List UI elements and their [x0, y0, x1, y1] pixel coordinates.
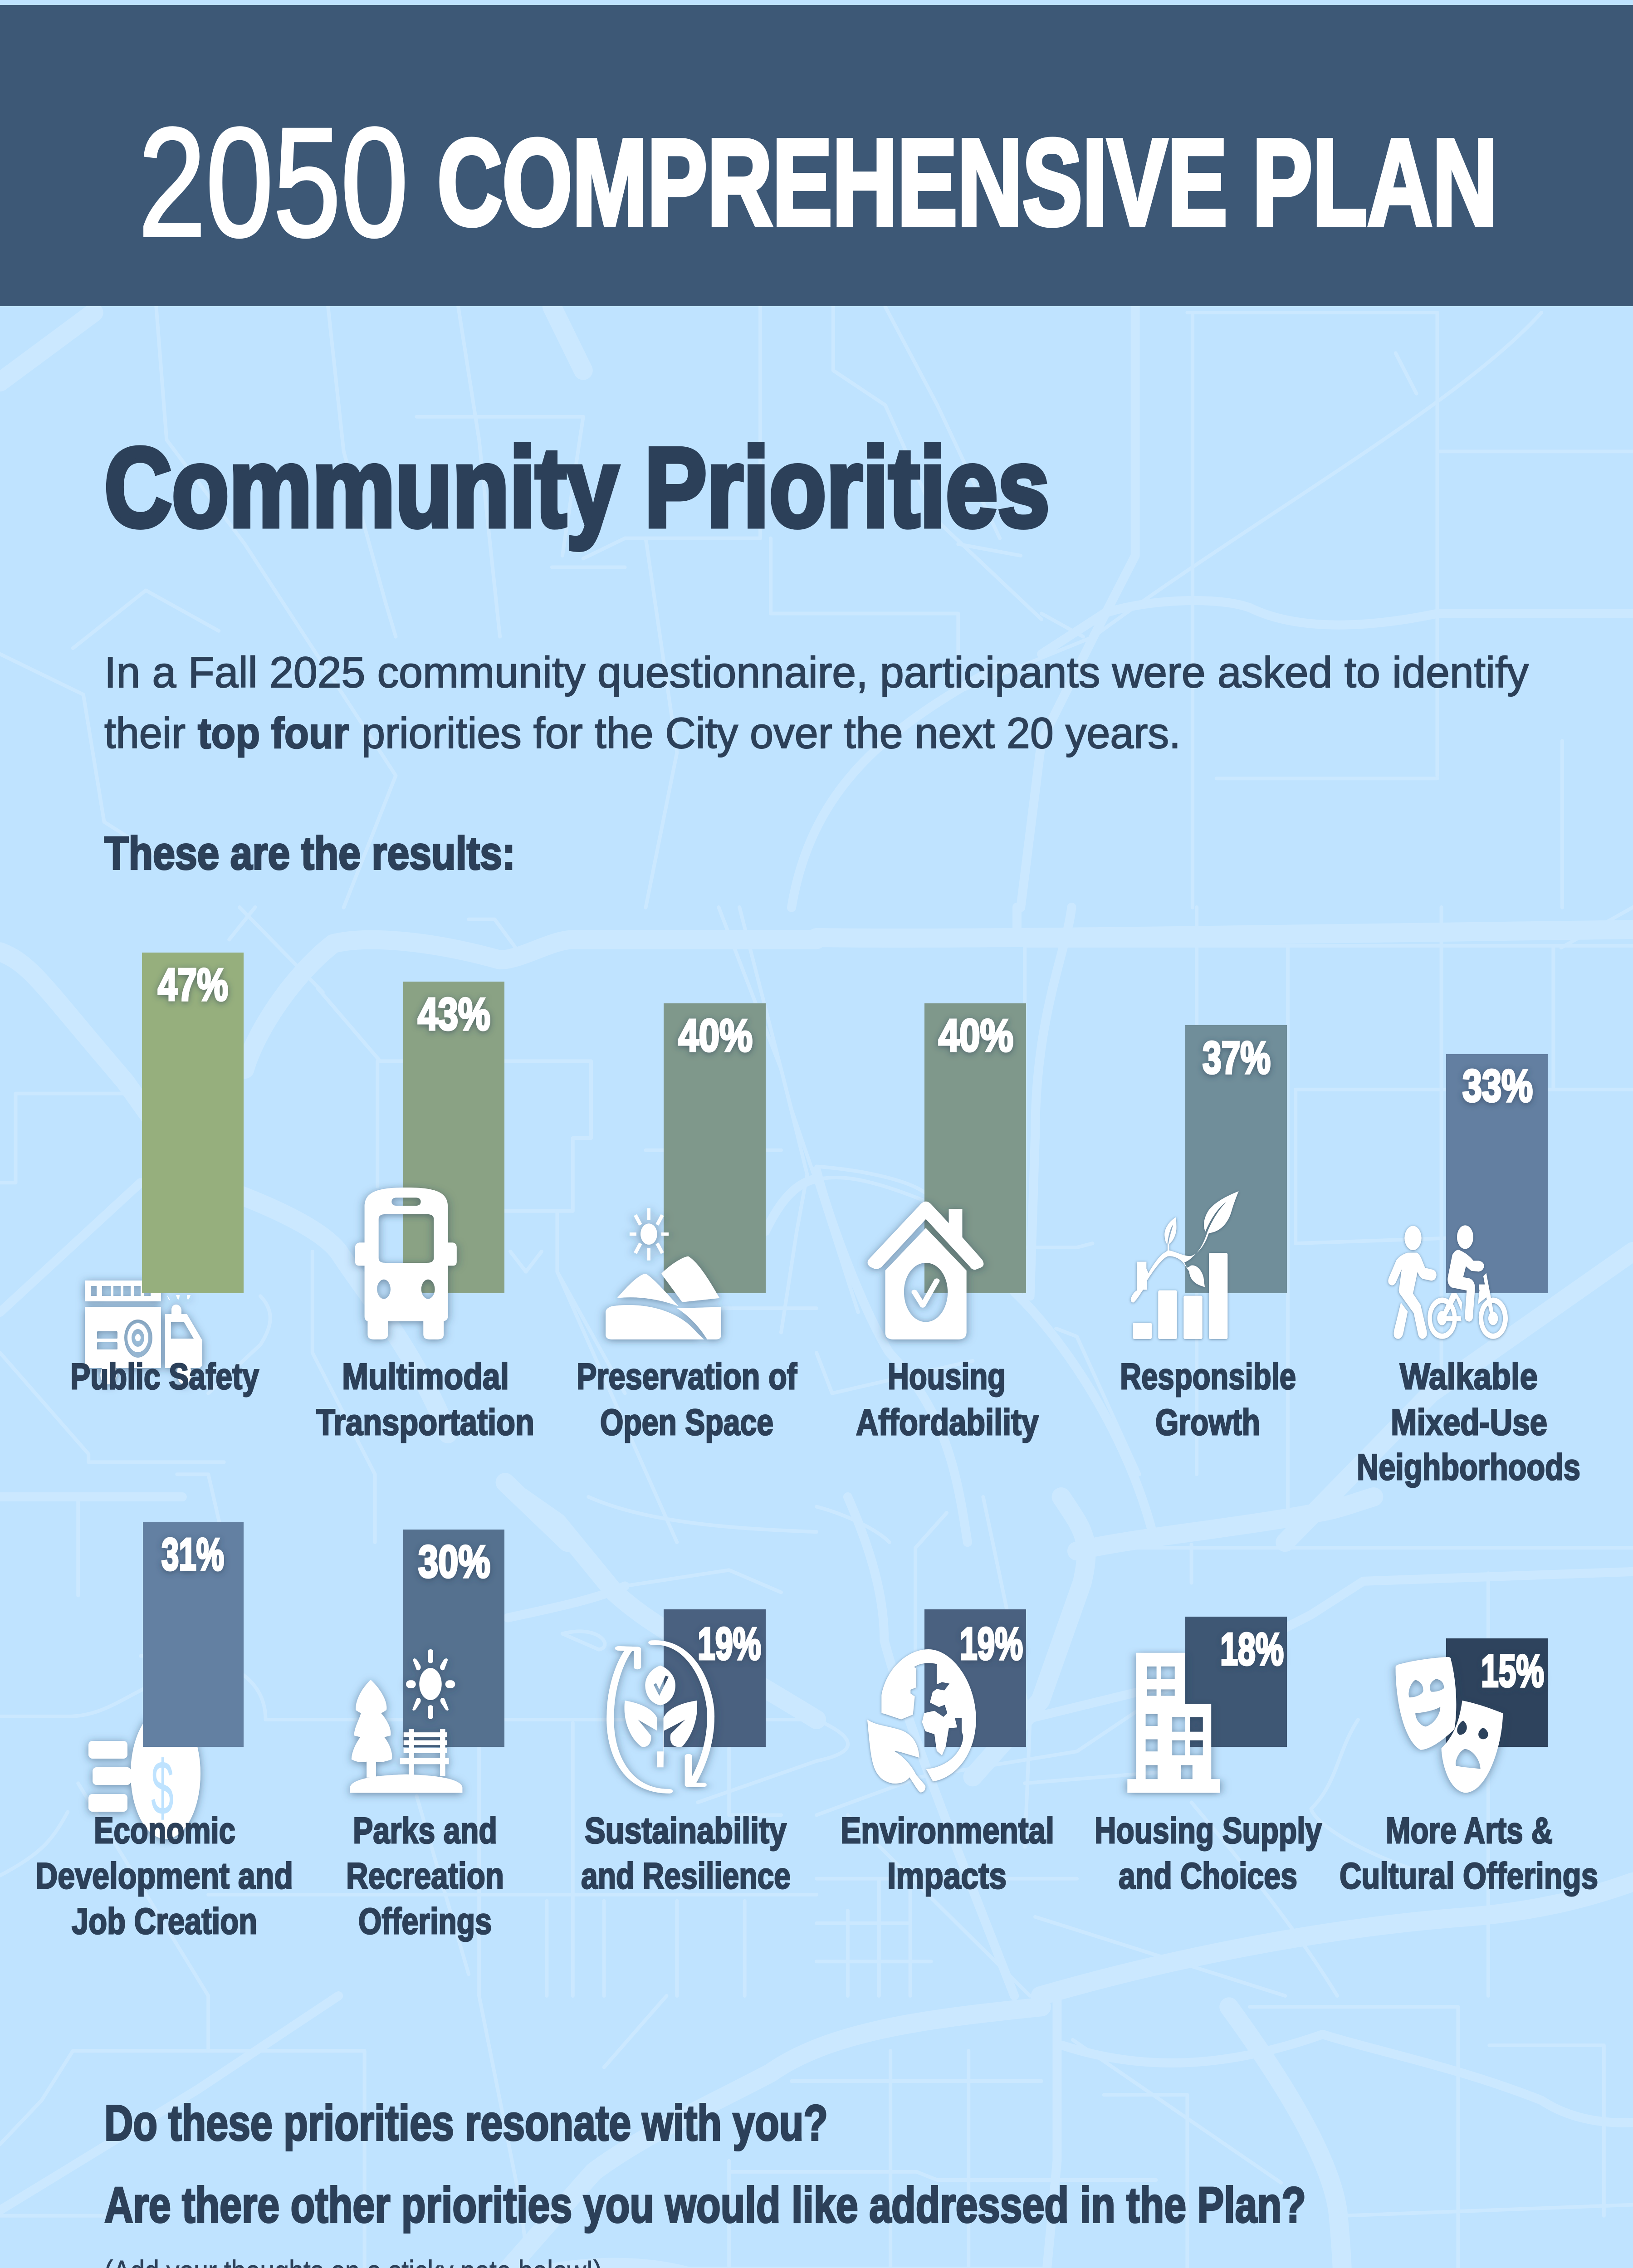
priority: housing supply and choices 18% — [1095, 1617, 1322, 1897]
value 37%: 37% — [1203, 1032, 1271, 1083]
label — [316, 1356, 534, 1443]
priority: environmental impacts 19% — [841, 1609, 1054, 1897]
bar 40% — [664, 1003, 766, 1293]
bar 37% — [1185, 1025, 1287, 1293]
bar 43% — [403, 982, 504, 1293]
icon: bus — [355, 1188, 457, 1339]
value 43%: 43% — [418, 989, 490, 1040]
label: Job Creation — [72, 1901, 257, 1942]
bar 47% — [142, 953, 244, 1293]
label — [581, 1810, 791, 1897]
label: Recreation — [346, 1856, 504, 1897]
label: Parks and — [353, 1810, 497, 1851]
value 19%: 19% — [698, 1618, 761, 1669]
priority: public safety 47% — [70, 953, 259, 1397]
bar 30% — [403, 1530, 504, 1747]
priority: walkable mixed-use neighborhoods 33% — [1357, 1054, 1580, 1488]
bar 40% — [924, 1003, 1026, 1293]
label: Affordability — [856, 1402, 1039, 1443]
priority: responsible growth 37% — [1120, 1025, 1296, 1443]
label: Transportation — [316, 1402, 534, 1443]
label: Economic — [94, 1810, 235, 1851]
title: 2050: 2050 — [138, 96, 408, 269]
label: Offerings — [358, 1901, 492, 1942]
label: More Arts & — [1386, 1810, 1553, 1851]
label — [856, 1356, 1039, 1443]
label — [577, 1356, 797, 1443]
label — [346, 1810, 504, 1942]
label: Public Safety — [70, 1356, 259, 1397]
icon: plant in recycling arrows — [610, 1642, 711, 1791]
intro paragraph: priorities for the City over the next 20 years. — [362, 709, 1181, 758]
header band — [0, 5, 1633, 306]
icon: globe and leaf — [867, 1649, 976, 1793]
value 18%: 18% — [1220, 1624, 1284, 1675]
icon: growth chart with plant — [1131, 1191, 1239, 1339]
question prompts — [104, 2095, 1306, 2268]
question prompts: Are there other priorities you would like addressed in the Plan? — [104, 2177, 1306, 2233]
value 31%: 31% — [161, 1529, 224, 1580]
label: Housing Supply — [1095, 1810, 1322, 1851]
label — [1340, 1810, 1598, 1897]
intro paragraph: their — [104, 709, 186, 758]
icon: coins — [88, 1708, 200, 1839]
icon: landscape with sun — [606, 1208, 721, 1339]
bar 31% — [143, 1522, 244, 1747]
priority: multimodal transportation 43% — [316, 982, 534, 1443]
priority: more arts and cultural offerings 15% — [1340, 1638, 1598, 1897]
intro paragraph: In a Fall 2025 community questionnaire, participants were asked to identify — [104, 648, 1529, 697]
icon: theatre masks — [1396, 1657, 1503, 1793]
label — [841, 1810, 1054, 1897]
label: Walkable — [1400, 1356, 1538, 1397]
bar 19% — [924, 1609, 1026, 1747]
label: and Choices — [1119, 1856, 1297, 1897]
priority: preservation of open space 40% — [577, 1003, 797, 1443]
icon: tree, bench and sun — [350, 1649, 462, 1793]
value 30%: 30% — [418, 1536, 490, 1587]
value 40%: 40% — [678, 1010, 753, 1061]
heading: community priorities: Community Priorities — [104, 424, 1050, 550]
label: Development and — [35, 1856, 293, 1897]
label: Preservation of — [577, 1356, 797, 1397]
bar 19% — [664, 1609, 766, 1747]
value 47%: 47% — [158, 959, 228, 1010]
value 15%: 15% — [1481, 1646, 1544, 1696]
dollar sign on coin: $ — [151, 1745, 174, 1831]
label — [1095, 1810, 1322, 1897]
question prompts: Do these priorities resonate with you? — [104, 2095, 828, 2151]
priority: parks and recreation 30% — [346, 1530, 504, 1942]
icon: pedestrian and cyclist — [1388, 1225, 1508, 1339]
label — [35, 1810, 293, 1942]
subheading: results: These are the results: — [104, 827, 515, 879]
bar 33% — [1446, 1054, 1548, 1293]
icon: house with check — [868, 1202, 983, 1339]
priority: sustainability and resilience 19% — [581, 1609, 791, 1897]
label: Housing — [888, 1356, 1006, 1397]
label: Growth — [1155, 1402, 1260, 1443]
priority: housing affordability 40% — [856, 1003, 1039, 1443]
label: Responsible — [1120, 1356, 1296, 1397]
label: Mixed-Use — [1391, 1402, 1547, 1443]
label — [1120, 1356, 1296, 1443]
bar 15% — [1446, 1638, 1548, 1747]
label: and Resilience — [581, 1856, 791, 1897]
value 40%: 40% — [939, 1010, 1013, 1061]
icon: apartment buildings — [1127, 1653, 1220, 1793]
label: Environmental — [841, 1810, 1054, 1851]
label — [1357, 1356, 1580, 1488]
bar 18% — [1185, 1617, 1287, 1747]
priority: economic development 31% — [35, 1522, 293, 1942]
label: Open Space — [600, 1402, 773, 1443]
label: Sustainability — [585, 1810, 787, 1851]
label: Neighborhoods — [1357, 1447, 1580, 1488]
label: Multimodal — [342, 1356, 509, 1397]
label: Impacts — [887, 1856, 1007, 1897]
value 19%: 19% — [960, 1618, 1023, 1669]
intro paragraph — [104, 648, 1529, 758]
intro paragraph: top four — [198, 709, 349, 758]
icon: fire truck — [85, 1281, 202, 1384]
value 33%: 33% — [1462, 1061, 1533, 1111]
